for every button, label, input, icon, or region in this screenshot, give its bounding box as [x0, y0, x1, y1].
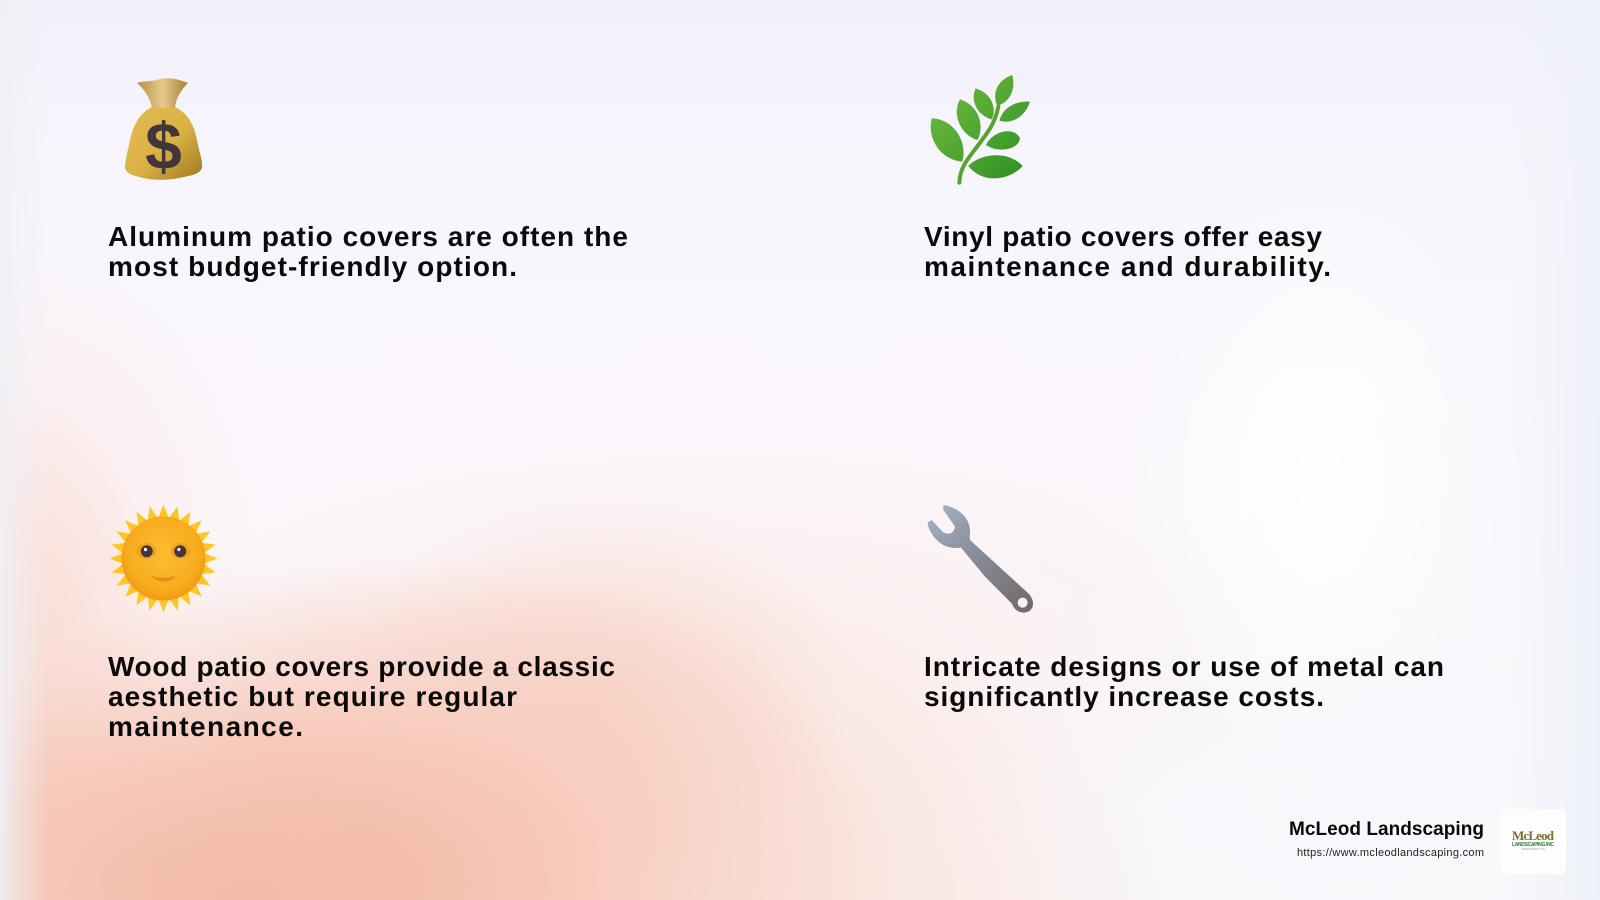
text: wood: Wood patio covers provide a classic: [108, 651, 615, 682]
icon: herb: [931, 75, 1030, 183]
text: aluminum: most budget-friendly option.: [108, 251, 517, 282]
brand url: https://www.mcleodlandscaping.com: [1297, 847, 1484, 859]
text: wood: aesthetic but require regular: [108, 681, 517, 712]
text: vinyl: maintenance and durability.: [924, 251, 1331, 282]
icon: sun with face: [110, 504, 218, 612]
text: intricate: significantly increase costs.: [924, 681, 1324, 712]
text: wood: maintenance.: [108, 711, 303, 742]
text: intricate: Intricate designs or use of metal can: [924, 651, 1444, 682]
brand footer: [1289, 809, 1566, 874]
brand name: McLeod Landscaping: [1289, 819, 1484, 840]
card: vinyl: [924, 75, 1331, 282]
text: vinyl: Vinyl patio covers offer easy: [924, 221, 1322, 252]
logo: McLeod: [1512, 828, 1555, 843]
logo: LANDSCAPING INC: [1512, 842, 1554, 848]
icon: money bag: [125, 78, 202, 183]
card: wood: [108, 504, 615, 742]
card: aluminum: [108, 78, 628, 282]
logo: TEWKSBURY, MA: [1521, 847, 1545, 851]
icon: wrench: [928, 505, 1033, 613]
icon: money bag: $: [145, 109, 182, 183]
logo: [1501, 809, 1566, 874]
card: intricate: [924, 505, 1444, 712]
text: aluminum: Aluminum patio covers are often the: [108, 221, 628, 252]
